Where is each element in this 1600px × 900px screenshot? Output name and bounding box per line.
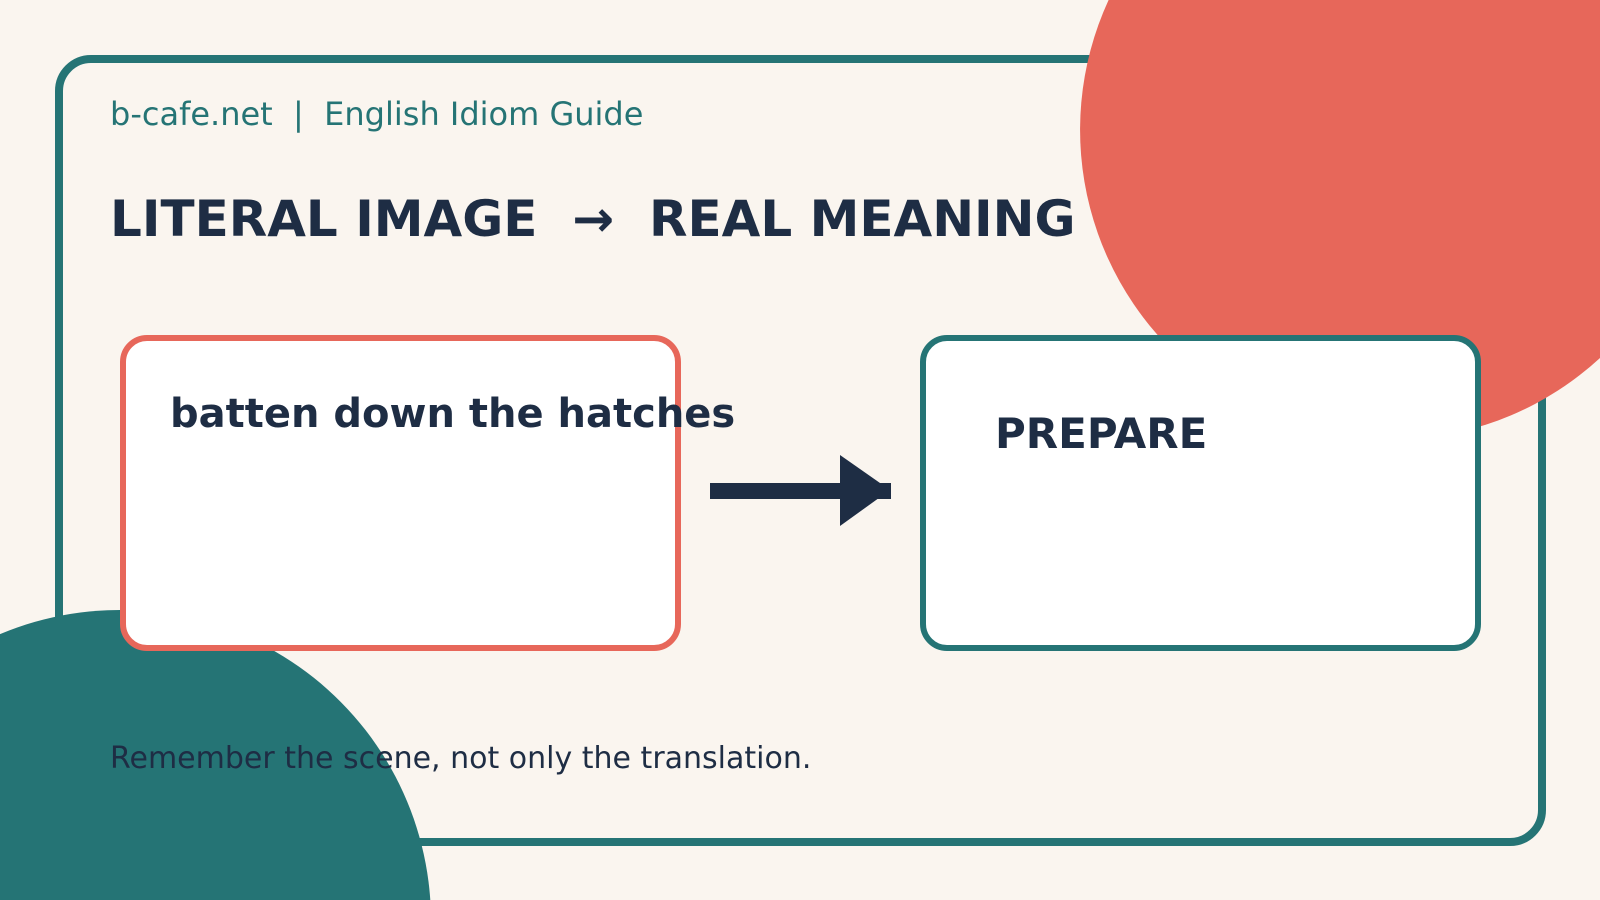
- decorative coral circle: [1080, 0, 1600, 440]
- decorative teal circle: [0, 610, 430, 900]
- arrow: [710, 455, 891, 526]
- panel: literal idiom: [123, 338, 735, 648]
- literal card box: [123, 338, 678, 648]
- idiom text: batten down the hatches: [170, 391, 735, 437]
- meaning text: PREPARE: [995, 409, 1207, 458]
- title: LITERAL IMAGE → REAL MEANING: [110, 190, 1076, 248]
- site label: b-cafe.net | English Idiom Guide: [110, 95, 643, 133]
- footer note: Remember the scene, not only the translation.: [110, 741, 811, 776]
- panel: real meaning: [923, 338, 1478, 648]
- meaning card box: [923, 338, 1478, 648]
